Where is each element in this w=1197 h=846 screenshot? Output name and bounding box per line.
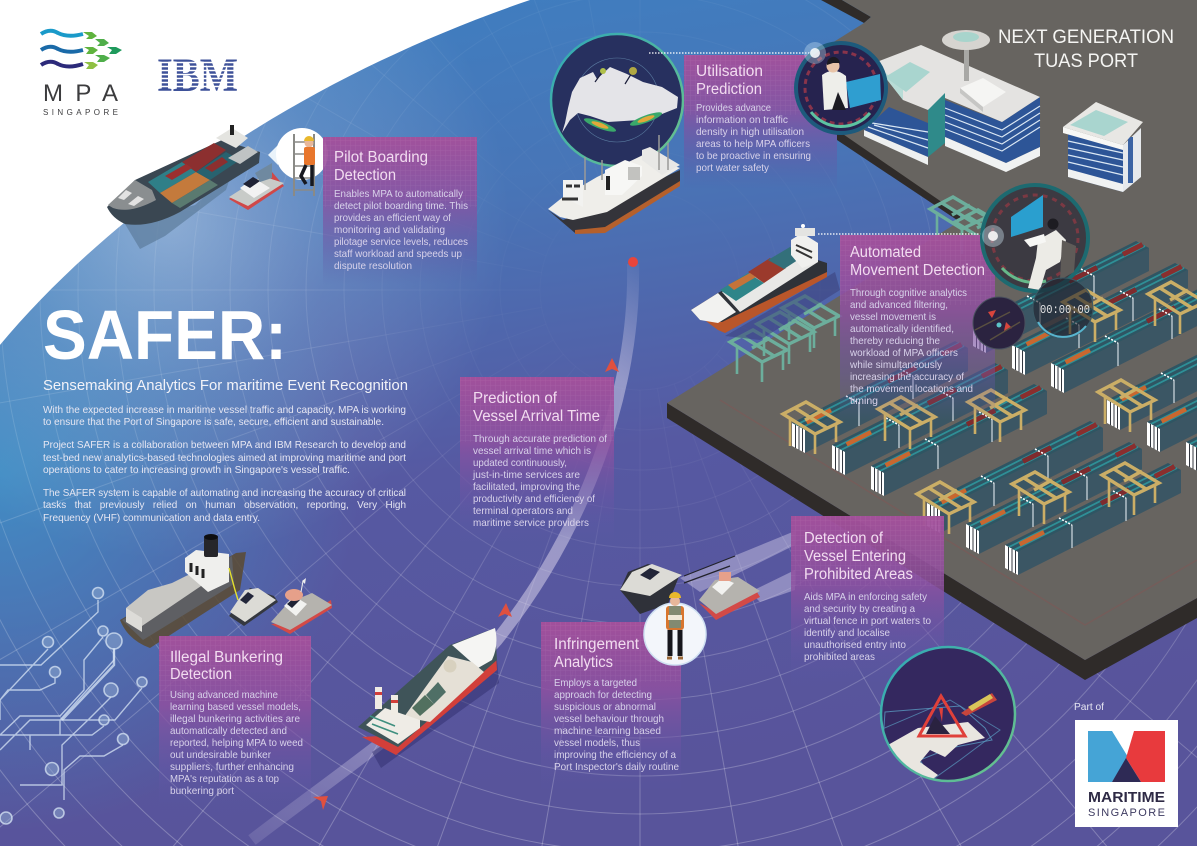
- small tender boat: [229, 588, 278, 626]
- text block: infringement description: vessel behaviour through: [554, 713, 664, 725]
- vessel route arrow track: [252, 257, 638, 840]
- text block: automated movement description: while simultaneously: [849, 359, 943, 371]
- text block: automated movement description: Through cognitive analytics: [850, 287, 967, 299]
- heading: Prediction of Vessel Arrival Time: Vessel Arrival Time: [473, 408, 600, 425]
- gantry cranes: [783, 282, 1197, 534]
- tanker vessel on route: [358, 628, 499, 768]
- text block: arrival time description: vessel arrival time which is: [473, 445, 591, 457]
- text block: illegal bunkering description: suppliers, further enhancing: [170, 761, 294, 773]
- heading: Pilot Boarding Detection: [334, 149, 428, 184]
- text block: SAFER introduction: operations to cater to increasing growth in Singapore's vessel traffic.: [43, 464, 350, 476]
- circuit pattern: [0, 588, 147, 824]
- bunker barge with red hull: [271, 578, 332, 634]
- speeding boats illustration: [620, 556, 760, 620]
- text block: infringement description: [554, 677, 679, 773]
- panel: Utilisation Prediction: [684, 55, 837, 190]
- text block: illegal bunkering description: [170, 689, 303, 797]
- callout: dotted line utilisation: [649, 52, 864, 54]
- lower container rows: [792, 341, 1181, 575]
- text block: arrival time description: Through accurate prediction of: [473, 433, 607, 445]
- text block: SAFER introduction: Frequency (VHF) communication and data entry.: [43, 512, 260, 524]
- text block: pilot boarding description: [334, 188, 468, 272]
- heading: Automated Movement Detection: Movement Detection: [850, 262, 985, 279]
- heading: Next Generation Tuas Port: NEXT GENERATION: [998, 27, 1174, 48]
- icon: pilot climbing ladder callout: [268, 128, 328, 196]
- label: part of: Part of: [1074, 701, 1104, 713]
- heading: Next Generation Tuas Port: TUAS PORT: [1034, 51, 1138, 72]
- text block: utilisation description: [696, 102, 811, 174]
- heading: Pilot Boarding Detection: Detection: [334, 167, 396, 184]
- heading: Illegal Bunkering Detection: [170, 649, 283, 683]
- title: SAFER: SAFER:: [43, 296, 287, 374]
- text block: utilisation description: density in high utilisation: [696, 126, 804, 138]
- logo: MPA Singapore: [41, 31, 122, 117]
- icon: operator at screen in HUD circle: [982, 185, 1088, 291]
- text block: infringement description: machine learning based: [554, 725, 661, 737]
- text block: pilot boarding description: staff workload and speeds up: [334, 248, 462, 260]
- panel: Prediction of Vessel Arrival Time: [460, 377, 614, 542]
- container yard: [783, 241, 1197, 575]
- text block: illegal bunkering description: MPA's reputation as a top: [170, 773, 279, 785]
- icon: prohibited area warning circle: [880, 647, 1015, 785]
- heading: Automated Movement Detection: Automated: [850, 244, 921, 261]
- container ship at quay: [691, 224, 840, 340]
- text block: utilisation description: to be proactive in ensuring: [696, 150, 811, 162]
- text block: arrival time description: updated continuously,: [473, 457, 567, 469]
- text block: prohibited areas description: virtual fence in port waters to: [804, 615, 931, 627]
- text block: automated movement description: the movement locations and: [850, 383, 973, 395]
- text block: automated movement description: automatically identified,: [850, 323, 954, 335]
- heading: Infringement Analytics: Analytics: [554, 654, 613, 671]
- pilot vessel: container ship: [107, 125, 260, 249]
- timer circle: 00:00:00: [1040, 303, 1090, 317]
- icon: port inspector: [644, 592, 706, 665]
- text block: illegal bunkering description: automatically detected and: [170, 725, 287, 737]
- heading: Prediction of Vessel Arrival Time: [473, 390, 600, 425]
- text block: arrival time description: maritime service providers: [473, 517, 589, 529]
- text block: illegal bunkering description: learning based vessel models,: [170, 701, 301, 713]
- text block: illegal bunkering description: Using advanced machine: [170, 689, 278, 701]
- pilot boat: [229, 163, 284, 210]
- text block: infringement description: improving the efficiency of a: [554, 749, 676, 761]
- text block: illegal bunkering description: reported, helping MPA to weed: [170, 737, 303, 749]
- text block: automated movement description: vessel movement is: [850, 311, 936, 323]
- text block: illegal bunkering description: illegal bunkering activities are: [170, 713, 300, 725]
- logo: Maritime Singapore: MARITIME: [1088, 790, 1165, 806]
- upper container rows: [973, 241, 1197, 472]
- text block: arrival time description: just-in-time services are: [472, 469, 580, 481]
- heading: Utilisation Prediction: Utilisation: [696, 63, 763, 80]
- text block: utilisation description: information on traffic: [696, 114, 788, 126]
- text block: arrival time description: terminal operators and: [473, 505, 573, 517]
- timer circle: [1033, 278, 1093, 338]
- speed trails: [680, 531, 795, 602]
- icon: small vessel tracking circle: [973, 297, 1025, 349]
- small port building: [1063, 102, 1143, 192]
- text block: pilot boarding description: monitoring and validating: [334, 224, 445, 236]
- map circle: Singapore traffic density: [551, 34, 683, 166]
- heading: Utilisation Prediction: [696, 63, 763, 98]
- heading: Utilisation Prediction: Prediction: [696, 81, 762, 98]
- heading: Infringement Analytics: [554, 636, 640, 671]
- text block: infringement description: approach for detecting: [554, 689, 652, 701]
- text block: SAFER introduction: The SAFER system is capable of automating and increasing the accuracy of critical: [43, 487, 406, 499]
- main port building: [864, 30, 1040, 172]
- panel: Automated Movement Detection: [840, 235, 995, 420]
- text block: pilot boarding description: dispute resolution: [334, 260, 412, 272]
- panel: Pilot Boarding Detection: [323, 137, 477, 285]
- text block: illegal bunkering description: out undesirable bunker: [170, 749, 271, 761]
- text block: prohibited areas description: identify and localise: [804, 627, 890, 639]
- text block: SAFER introduction: to ensure that the Port of Singapore is safe, secure, efficient and sustainable.: [43, 416, 384, 428]
- logo: MPA Singapore: MPA: [43, 80, 118, 107]
- panel: Illegal Bunkering Detection: [159, 636, 311, 811]
- icon: operator at laptop in HUD circle: [796, 43, 886, 133]
- text block: prohibited areas description: Aids MPA in enforcing safety: [804, 591, 928, 603]
- text block: pilot boarding description: pilotage service levels, reduces: [334, 236, 468, 248]
- text block: prohibited areas description: [804, 591, 931, 663]
- text block: utilisation description: areas to help MPA officers: [696, 138, 810, 150]
- glow marker utilisation: [804, 42, 826, 64]
- green quay cranes: [730, 197, 1012, 382]
- text block: automated movement description: workload of MPA officers: [849, 347, 958, 359]
- logo: IBM: IBM: [157, 49, 238, 102]
- text block: illegal bunkering description: bunkering port: [170, 785, 234, 797]
- text block: infringement description: vessel models, thus: [554, 737, 640, 749]
- text block: infringement description: suspicious or abnormal: [554, 701, 656, 713]
- text block: SAFER introduction: test-bed new analytics-based technologies aimed at improving maritime and port: [43, 452, 406, 464]
- heading: Illegal Bunkering Detection: Illegal Bunkering: [170, 649, 283, 666]
- text block: arrival time description: facilitated, improving the: [473, 481, 580, 493]
- heading: Pilot Boarding Detection: Pilot Boarding: [334, 149, 428, 166]
- panel: Detection of Vessel Entering Prohibited Areas: [791, 516, 944, 686]
- text block: arrival time description: productivity and efficiency of: [473, 493, 595, 505]
- heading: Detection of Vessel Entering Prohibited Areas: Prohibited Areas: [804, 566, 913, 583]
- heading: Prediction of Vessel Arrival Time: Prediction of: [473, 390, 558, 407]
- subtitle: Sensemaking Analytics For maritime Event Recognition: [43, 378, 408, 394]
- heading: Detection of Vessel Entering Prohibited Areas: [804, 530, 913, 583]
- heading: Infringement Analytics: Infringement: [554, 636, 640, 653]
- text block: infringement description: Employs a targeted: [554, 677, 637, 689]
- glow marker automated movement: [982, 225, 1004, 247]
- text block: utilisation description: Provides advance: [696, 102, 771, 114]
- text block: pilot boarding description: Enables MPA to automatically: [334, 188, 464, 200]
- text block: pilot boarding description: detect pilot boarding time. This: [334, 200, 468, 212]
- panel: Infringement Analytics: [541, 622, 681, 792]
- text block: automated movement description: thereby reducing the: [850, 335, 940, 347]
- text block: prohibited areas description: and security by creating a: [804, 603, 915, 615]
- text block: infringement description: Port Inspector's daily routine: [554, 761, 679, 773]
- text block: prohibited areas description: unauthorised entry into: [804, 639, 906, 651]
- heading: Illegal Bunkering Detection: Detection: [170, 666, 232, 683]
- logo: MPA Singapore: SINGAPORE: [43, 108, 118, 117]
- text block: SAFER introduction: With the expected increase in maritime vessel traffic and capacity, MPA is working: [43, 404, 406, 416]
- vessel below map: [548, 135, 680, 234]
- text block: automated movement description: [849, 287, 973, 407]
- port land platform: [667, 0, 1197, 680]
- heading: Next Generation Tuas Port: [998, 27, 1174, 72]
- logo: Maritime Singapore: [1075, 720, 1178, 827]
- heading: Detection of Vessel Entering Prohibited Areas: Vessel Entering: [804, 548, 906, 565]
- text block: utilisation description: port water safety: [696, 162, 770, 174]
- text block: arrival time description: [472, 433, 607, 529]
- text block: SAFER introduction: [43, 404, 406, 524]
- text block: prohibited areas description: prohibited areas: [804, 651, 875, 663]
- logo: Maritime Singapore: SINGAPORE: [1088, 807, 1165, 819]
- callout: dotted line automated movement: [818, 233, 985, 235]
- text block: automated movement description: and advanced filtering,: [850, 299, 948, 311]
- text block: automated movement description: timing: [850, 395, 878, 407]
- text block: SAFER introduction: Project SAFER is a collaboration between MPA and IBM Research to develop and: [43, 439, 406, 451]
- text block: automated movement description: increasing the accuracy of: [850, 371, 964, 383]
- heading: Automated Movement Detection: [850, 244, 985, 279]
- text block: pilot boarding description: provides an efficient way of: [334, 212, 451, 224]
- bunkering vessels illustration: [120, 534, 332, 648]
- text block: SAFER introduction: tasks that previously relied on human observation, reporting, Very High: [43, 499, 406, 511]
- heading: Detection of Vessel Entering Prohibited Areas: Detection of: [804, 530, 884, 547]
